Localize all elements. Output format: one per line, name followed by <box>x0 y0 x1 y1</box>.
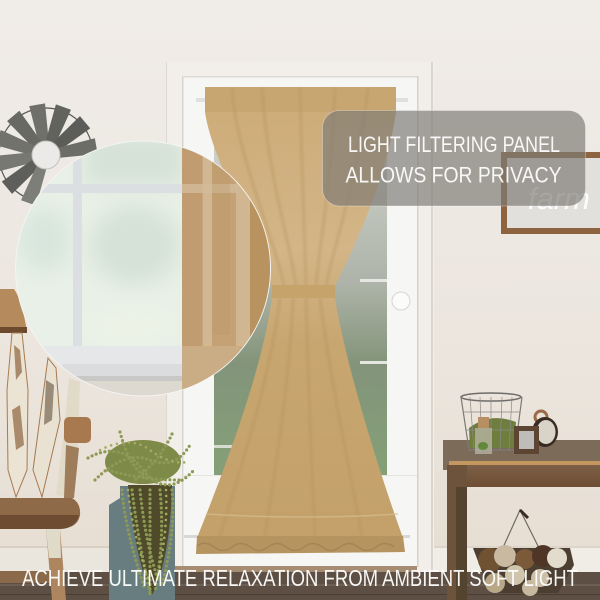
alarm clock <box>532 411 558 447</box>
callout text: ALLOWS FOR PRIVACY <box>346 162 562 188</box>
plant <box>88 432 194 596</box>
magnified detail circle <box>10 135 277 401</box>
rustic chair <box>0 333 91 600</box>
callout panel <box>322 110 586 206</box>
curtain tieback <box>272 285 335 298</box>
floor <box>0 572 600 600</box>
wire basket of rattan balls <box>473 510 574 596</box>
baseboard <box>0 546 600 573</box>
milk can <box>109 486 175 600</box>
wall sign: farm: farm <box>528 181 590 216</box>
curtain rod <box>184 98 410 538</box>
sheer tan curtain panel <box>196 87 405 554</box>
wall shelf edge <box>0 289 27 333</box>
wall sign: farm <box>501 152 600 234</box>
wire basket with greenery <box>461 393 522 454</box>
door and frame <box>166 62 434 572</box>
blurred window view <box>16 142 182 346</box>
callout text <box>346 132 562 188</box>
windmill wall decor <box>0 103 98 206</box>
rustic console table <box>443 440 600 600</box>
small picture frame <box>514 426 539 454</box>
enlarged curtain fabric <box>182 148 270 390</box>
window muntins <box>41 157 182 396</box>
door knob <box>392 292 410 310</box>
